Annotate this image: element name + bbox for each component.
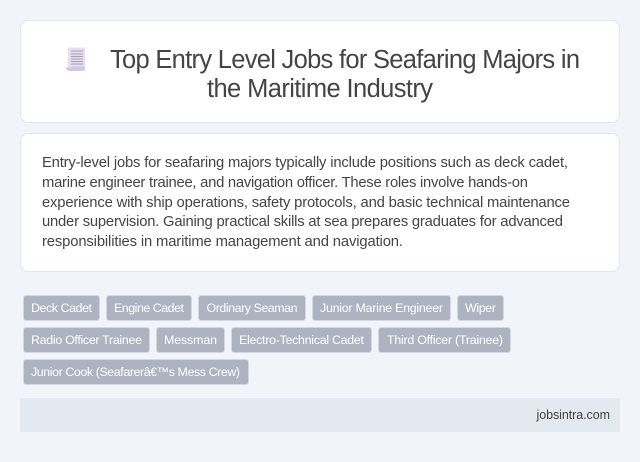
tag: Third Officer (Trainee): Third Officer (Trainee) [387,333,503,347]
description text: responsibilities in maritime management and navigation. [42,234,403,250]
tag: Engine Cadet [106,296,192,320]
tag: Junior Marine Engineer: Junior Marine Engineer [320,301,443,315]
tag: Ordinary Seaman [198,296,306,320]
title: the Maritime Industry [207,75,433,103]
tag: Third Officer (Trainee) [378,328,510,352]
tag: Radio Officer Trainee [24,328,150,352]
panel: header card [20,20,620,122]
description text: experience with ship operations, safety protocols, and basic technical maintenance [42,195,570,211]
title: Top Entry Level Jobs for Seafaring Majors in [110,46,580,74]
panel: description card [20,134,620,272]
description text [42,155,570,250]
tag: Messman [156,328,224,352]
tag: Radio Officer Trainee: Radio Officer Trainee [31,333,142,347]
tag: Deck Cadet: Deck Cadet [31,301,93,315]
tag: Junior Cook [24,360,248,384]
tag: Wiper: Wiper [465,301,496,315]
description text: under supervision. Gaining practical skills at sea prepares graduates for advanced [42,214,563,230]
tag: Wiper [458,296,504,320]
icon: paper scroll [66,48,85,71]
tag: Junior Cook: Junior Cook (Seafarerâ€™s Mess Crew) [31,365,240,379]
tag: Deck Cadet [24,296,100,320]
description text: Entry-level jobs for seafaring majors typically include positions such as deck cadet, [42,155,568,171]
tag: Electro-Technical Cadet: Electro-Technical Cadet [239,333,365,347]
description text: marine engineer trainee, and navigation officer. These roles involve hands-on [42,175,528,191]
footer bar [20,398,620,432]
title [110,46,580,103]
tag list [24,296,510,384]
footer source text: jobsintra.com [536,408,610,422]
tag: Junior Marine Engineer [312,296,450,320]
tag: Engine Cadet: Engine Cadet [114,301,185,315]
tag: Ordinary Seaman: Ordinary Seaman [206,301,298,315]
tag: Messman: Messman [164,333,217,347]
tag: Electro-Technical Cadet [232,328,372,352]
